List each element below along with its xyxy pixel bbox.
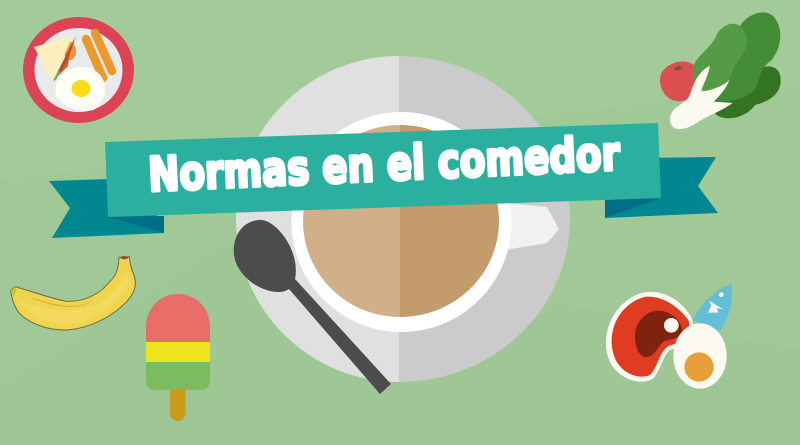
coffee: [303, 125, 499, 317]
icon: meat, egg and fish: [606, 284, 732, 389]
egg yolk: [684, 352, 714, 382]
yolk: [72, 80, 90, 97]
bok choy stem: [670, 66, 733, 129]
banana highlight: [17, 272, 129, 325]
ribbon: left tail: [49, 178, 164, 238]
boiled egg: [673, 323, 727, 389]
cup handle: [505, 203, 559, 250]
tomato: [660, 61, 699, 101]
green band: [146, 362, 210, 390]
red band: [146, 294, 210, 342]
banana tip: [11, 287, 17, 297]
ribbon: right tail: [605, 157, 718, 218]
icon: ice pop: [146, 294, 210, 421]
sausages: [86, 33, 112, 78]
dark leaf: [713, 66, 781, 118]
ribbon: main banner: [105, 123, 661, 217]
fish: [693, 284, 732, 332]
steak: [606, 292, 693, 382]
main leaf: [714, 12, 780, 102]
front leaf: [693, 24, 747, 92]
saucer: [236, 56, 570, 382]
icon: breakfast plate: [23, 17, 134, 123]
tomato stem: [673, 66, 683, 71]
stick: [170, 388, 186, 421]
spoon: [234, 220, 391, 394]
icon: banana: [11, 256, 135, 330]
sandwich: [34, 36, 76, 81]
coffee cup: [292, 112, 559, 332]
banana crease: [31, 297, 93, 307]
banana stem end: [120, 256, 128, 259]
fried egg: [56, 67, 105, 111]
title: Normas en el comedor: [147, 127, 622, 203]
icon: vegetables: [660, 12, 781, 129]
yellow band: [146, 342, 210, 362]
